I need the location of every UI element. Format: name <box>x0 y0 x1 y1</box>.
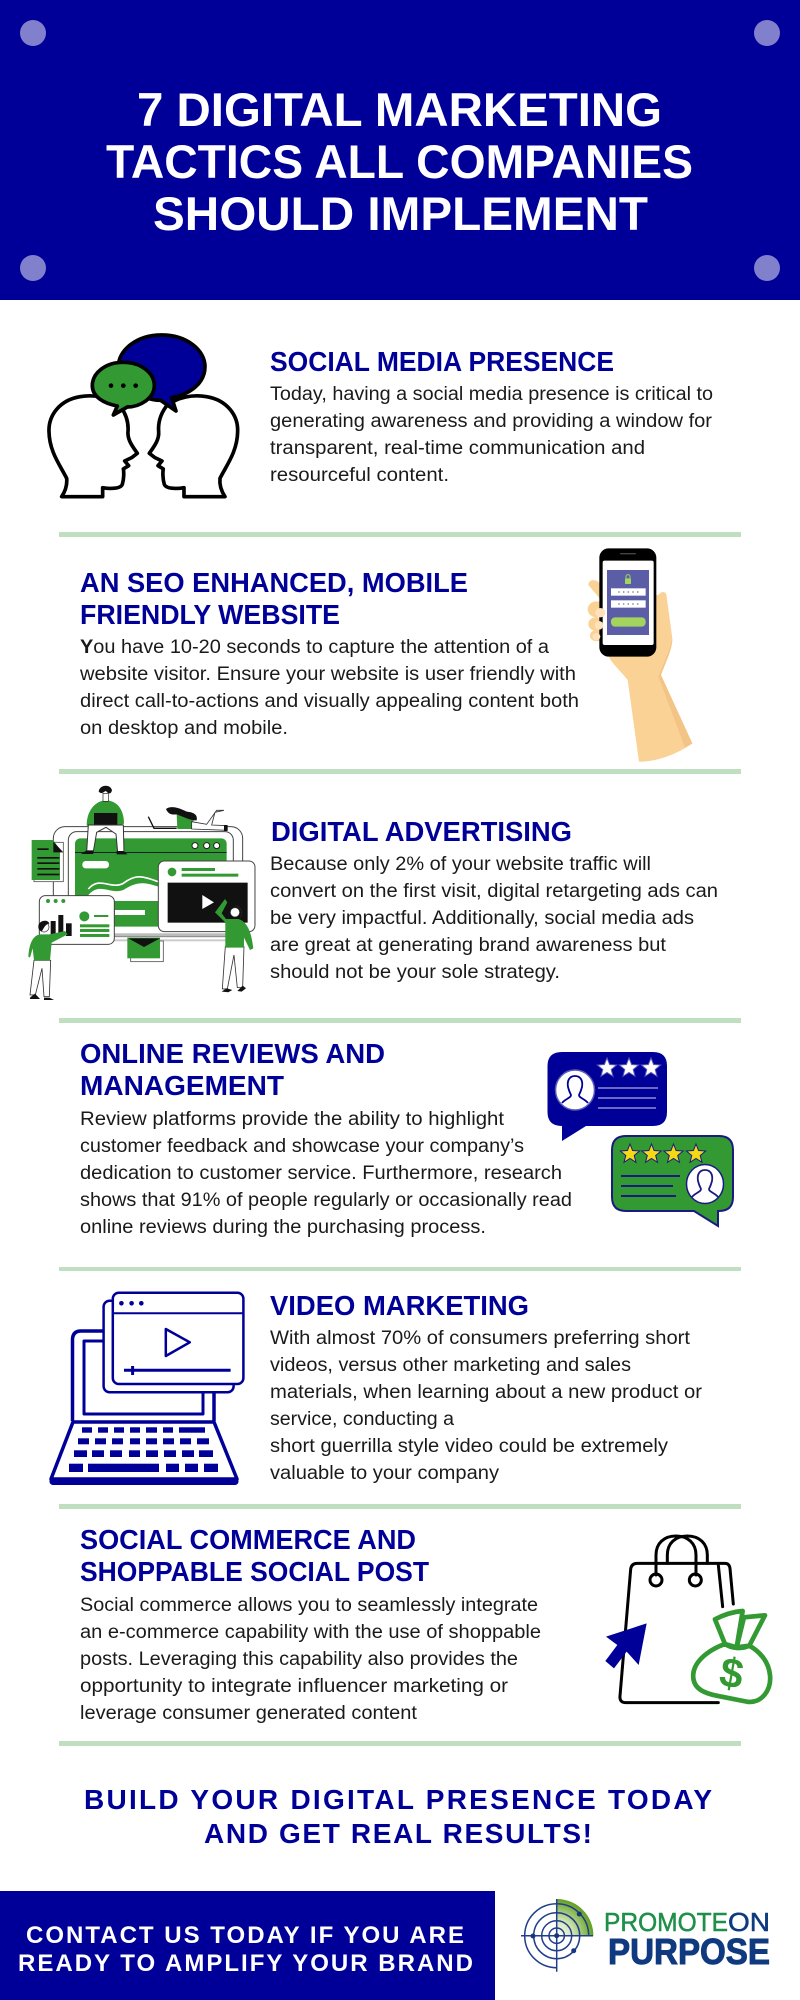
text block: be very impactful. Additionally, social media ads <box>270 908 694 929</box>
text block <box>270 854 718 983</box>
heading: AN SEO ENHANCED, MOBILE <box>80 567 468 598</box>
icon: green review bubble <box>612 1136 733 1226</box>
text block: leverage consumer generated content <box>80 1703 418 1724</box>
text block: videos, versus other marketing and sales <box>270 1355 631 1376</box>
icon: shopping bag with cursor and money bag: $ <box>716 1648 747 1698</box>
logo: promote on purpose: PROMOTE <box>604 1907 728 1937</box>
title: SHOULD IMPLEMENT <box>153 187 648 240</box>
text block: Because only 2% of your website traffic will <box>270 854 651 875</box>
text block: direct call-to-actions and visually appealing content both <box>80 691 579 712</box>
icon: shopping bag with cursor and money bag <box>605 1536 770 1703</box>
heading <box>80 567 468 630</box>
heading: SHOPPABLE SOCIAL POST <box>80 1556 429 1587</box>
text block <box>270 1328 703 1484</box>
text block: online reviews during the purchasing process. <box>80 1217 486 1238</box>
text block <box>79 637 579 739</box>
text block: opportunity to integrate influencer marketing or <box>80 1676 509 1697</box>
title: TACTICS ALL COMPANIES <box>106 135 693 188</box>
text block: transparent, real-time communication and <box>270 438 645 459</box>
heading: SOCIAL MEDIA PRESENCE <box>270 346 614 377</box>
panel: header banner <box>0 0 800 300</box>
logo: promote on purpose: PURPOSE <box>608 1931 770 1972</box>
text block: on desktop and mobile. <box>80 718 288 739</box>
panel: video marketing <box>51 1290 703 1484</box>
text block: convert on the first visit, digital retargeting ads can <box>270 881 718 902</box>
heading: FRIENDLY WEBSITE <box>80 599 340 630</box>
text block: dedication to customer service. Furthermore, research <box>80 1163 562 1184</box>
text block: an e-commerce capability with the use of shoppable <box>80 1622 541 1643</box>
text block <box>80 1595 541 1724</box>
panel: contact bar <box>0 1891 495 2000</box>
text block: customer feedback and showcase your company’s <box>80 1136 524 1157</box>
heading: MANAGEMENT <box>80 1070 284 1101</box>
heading <box>80 1038 385 1101</box>
logo: promote on purpose: ON <box>728 1907 770 1937</box>
heading: DIGITAL ADVERTISING <box>271 816 572 847</box>
text block: resourceful content. <box>270 465 449 486</box>
icon: blue review bubble <box>548 1052 667 1141</box>
text block: Today, having a social media presence is critical to <box>270 384 713 405</box>
panel: contact bar: READY TO AMPLIFY YOUR BRAND <box>18 1950 473 1977</box>
text block: Social commerce allows you to seamlessly integrate <box>80 1595 538 1616</box>
text block: are great at generating brand awareness but <box>270 935 667 956</box>
panel: seo website <box>79 548 692 762</box>
panel: contact bar: CONTACT US TODAY IF YOU ARE <box>26 1922 464 1949</box>
heading <box>80 1524 429 1587</box>
title: 7 DIGITAL MARKETING <box>137 83 662 136</box>
icon: two heads with speech bubbles <box>49 335 238 497</box>
icon: laptop with video windows <box>51 1293 243 1484</box>
title <box>106 83 693 240</box>
panel: digital advertising <box>28 786 718 1000</box>
text block <box>270 384 713 486</box>
heading: ONLINE REVIEWS AND <box>80 1038 385 1069</box>
sitting person <box>81 786 128 854</box>
callout: build your digital presence <box>84 1784 712 1849</box>
callout: build your digital presence: AND GET REAL RESULTS! <box>204 1818 592 1849</box>
text block: website visitor. Ensure your website is user friendly with <box>79 664 576 685</box>
text block: Review platforms provide the ability to highlight <box>80 1109 505 1130</box>
text block: service, conducting a <box>270 1409 454 1430</box>
text block: shows that 91% of people regularly or occasionally read <box>80 1190 572 1211</box>
text block: materials, when learning about a new product or <box>270 1382 703 1403</box>
text block: You have 10-20 seconds to capture the attention of a <box>80 637 549 658</box>
panel: social commerce <box>80 1524 770 1724</box>
panel: online reviews <box>80 1038 733 1238</box>
lying person <box>148 807 227 831</box>
text block: With almost 70% of consumers preferring short <box>270 1328 691 1349</box>
left person <box>28 921 68 1000</box>
heading: SOCIAL COMMERCE AND <box>80 1524 416 1555</box>
callout: build your digital presence: BUILD YOUR DIGITAL PRESENCE TODAY <box>84 1784 712 1815</box>
text block: generating awareness and providing a window for <box>270 411 713 432</box>
text block <box>80 1109 572 1238</box>
text block: should not be your sole strategy. <box>270 962 560 983</box>
heading: VIDEO MARKETING <box>270 1290 529 1321</box>
icon: hand holding phone <box>588 548 692 762</box>
logo: promote on purpose <box>521 1899 770 1972</box>
text block: posts. Leveraging this capability also provides the <box>80 1649 518 1670</box>
right person <box>215 899 253 992</box>
illustration: people around web windows <box>28 786 255 1000</box>
text block: short guerrilla style video could be extremely <box>270 1436 669 1457</box>
panel: social media presence <box>49 335 713 497</box>
text block: valuable to your company <box>270 1463 500 1484</box>
